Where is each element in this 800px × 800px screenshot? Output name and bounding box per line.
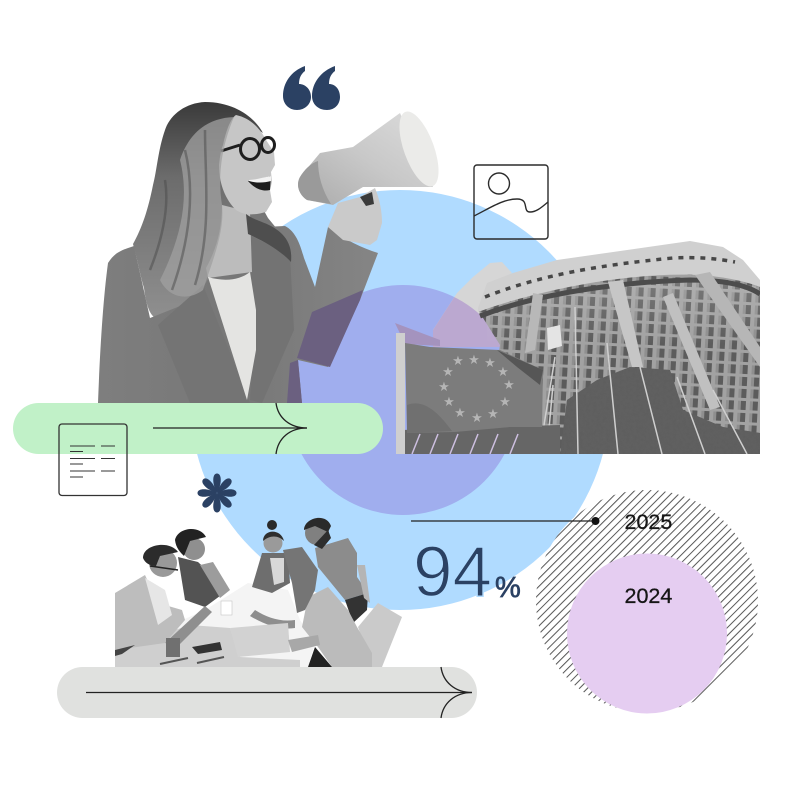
sweater shadow: [115, 645, 135, 656]
woman leaning: hair: [283, 547, 318, 613]
flagpole: [396, 333, 405, 454]
megaphone rear cap: [298, 161, 331, 204]
column 1: [525, 293, 543, 353]
flag stars: ★: [484, 355, 496, 370]
flag stars: ★: [503, 377, 515, 392]
asterisk icon: [198, 474, 236, 512]
open mouth: [248, 176, 271, 191]
inner periwinkle circle: [288, 285, 518, 515]
flag stars: ★: [487, 406, 499, 421]
flag stars: ★: [452, 353, 464, 368]
quotation mark icon: [283, 66, 340, 110]
document icon: [59, 424, 127, 496]
small chair: [357, 565, 370, 603]
man with glasses: sweater: [115, 575, 185, 650]
hatched circle: 2025: [536, 490, 770, 720]
tinted roof corner: [395, 323, 440, 346]
hair back: [133, 102, 292, 318]
blazer lapel shadow: [243, 232, 294, 403]
column 3: [663, 293, 720, 410]
man's forearm: [165, 606, 212, 646]
glass and objects on table: [166, 638, 180, 657]
woman leaning: shirt: [302, 587, 372, 667]
man with curly hair: [178, 557, 219, 607]
base strip: [402, 425, 560, 454]
leader line to 2025: [411, 517, 600, 525]
woman at back: [252, 553, 290, 593]
table: [178, 583, 314, 667]
man with glasses: head: [149, 549, 177, 577]
flag stars: ★: [443, 394, 455, 409]
laptop: [230, 623, 290, 657]
shadow under roof: [480, 280, 760, 316]
glass facade: [478, 272, 760, 454]
large blue circle: [190, 190, 610, 610]
arm on laptop: [250, 610, 295, 628]
tower: [433, 262, 512, 330]
glasses: [221, 138, 274, 160]
flag stars: ★: [454, 405, 466, 420]
trees: [560, 367, 760, 454]
woman leaning: skirt: [308, 647, 332, 667]
glass reflection: [547, 325, 562, 350]
table grey shade: [115, 625, 300, 667]
flag stars: ★: [497, 364, 509, 379]
flag stars: ★: [471, 410, 483, 425]
lilac circle: 2024: [567, 554, 727, 714]
man at back: trousers: [345, 594, 368, 622]
megaphone bell: [391, 107, 447, 191]
woman with megaphone: [98, 102, 447, 403]
tower lilac overlay: [433, 297, 500, 347]
face: [219, 115, 275, 214]
roof band: [478, 241, 760, 312]
column 2: [608, 280, 643, 367]
hand and forearm by laptop: [288, 635, 320, 652]
flag stars: [438, 352, 515, 425]
flag folds: [497, 350, 543, 385]
blazer: [98, 226, 378, 403]
flag stars: ★: [438, 379, 450, 394]
European Parliament building with flag: [395, 241, 760, 454]
white chest: [145, 578, 172, 625]
man at back: shirt: [315, 538, 368, 600]
green pill arrow: [153, 403, 307, 454]
team meeting photo: [115, 518, 402, 667]
label: 2025: 2025: [624, 510, 672, 534]
image placeholder icon: [474, 165, 548, 239]
flag stars: ★: [499, 394, 511, 409]
gray pill: [57, 667, 477, 718]
flag poles: [540, 307, 747, 454]
neck: [206, 205, 252, 278]
stat: 94 percent: %: [495, 572, 521, 604]
flag stars: ★: [468, 352, 480, 367]
hair front waves: [160, 117, 234, 297]
white shirt: [208, 272, 256, 400]
gray pill arrow: [86, 667, 472, 718]
hair drape on shoulder: [246, 214, 291, 262]
green pill: [13, 403, 383, 454]
label: 2024: 2024: [624, 584, 672, 608]
hand holding megaphone: [328, 188, 382, 245]
sleeve tinted by circle: [287, 290, 363, 403]
facade light reflections: [493, 277, 760, 328]
EU flag: [405, 343, 543, 433]
man at back: head: [305, 526, 329, 545]
megaphone body: [298, 113, 433, 205]
chair back right: [358, 603, 402, 667]
column 4: [695, 272, 760, 367]
window strip: [485, 258, 735, 297]
flag stars: ★: [442, 364, 454, 379]
stat: 94 percent: 94: [413, 533, 492, 612]
